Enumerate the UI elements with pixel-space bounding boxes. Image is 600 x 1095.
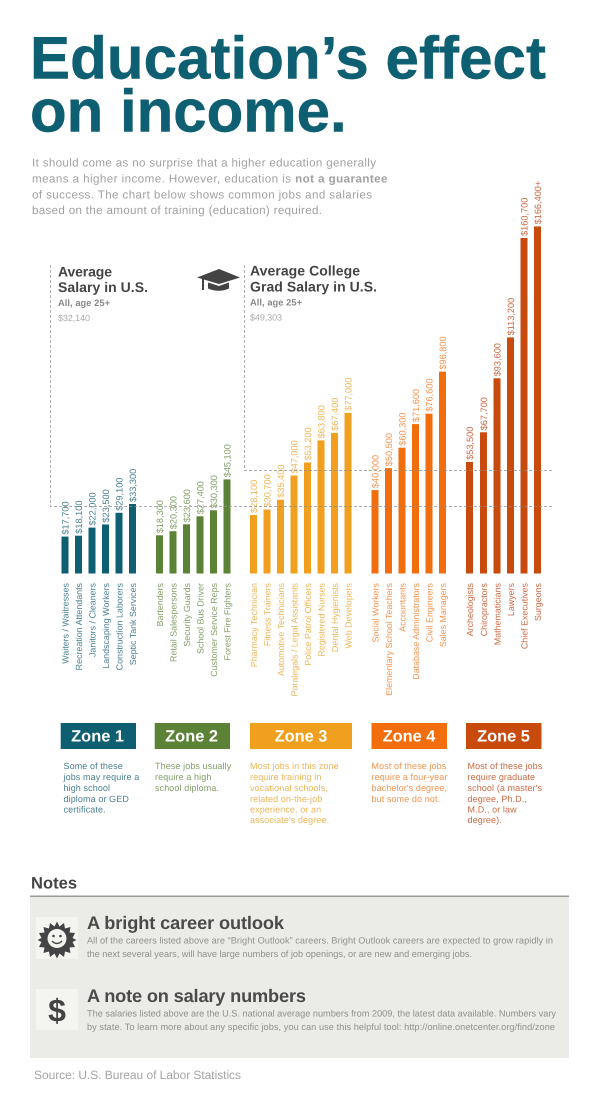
zone 4 bars: Elementary School Teachers (384, 582, 394, 696)
heading: average college grad salary: All, age 25+ (250, 298, 303, 308)
zone 3 bars (249, 378, 354, 696)
zone 4 legend: Zone 4 (383, 728, 436, 746)
intro paragraph: It should come as no surprise that a higher education generally (32, 157, 376, 170)
zone 5 bars: Archeologists (465, 582, 475, 636)
zone 4 bars: Sales Managers (438, 582, 448, 647)
zone 5 bars: Mathematicians (492, 582, 502, 645)
source: Source: U.S. Bureau of Labor Statistics (34, 1068, 241, 1082)
zone 3 legend (250, 723, 352, 825)
zone 1 bars: $33,300 (128, 469, 138, 502)
zone 5 bars: Chiropractors (479, 582, 489, 636)
zone 5 bars: Chief Executives (520, 582, 530, 649)
notes heading: Notes (31, 874, 77, 892)
zone 2 legend (155, 723, 232, 793)
zone 3 bars: $67,400 (330, 398, 340, 431)
zone 2 bars: Security Guards (182, 582, 192, 647)
zone 3 bars: $63,800 (316, 405, 326, 438)
zone 3 bars: $30,700 (262, 474, 272, 508)
title (30, 24, 546, 145)
zone 2 legend: These jobs usually (155, 761, 232, 771)
zone 5 legend (466, 723, 543, 825)
zone 4 bars: $76,600 (424, 378, 434, 412)
zone 3 bars: Registered Nurses (316, 582, 326, 656)
zone 5 legend: Most of these jobs (468, 761, 543, 771)
zone 5 bars (465, 181, 543, 649)
heading: average salary in U.S.: Average (58, 264, 112, 280)
heading: average college grad salary: $49,303 (250, 313, 282, 323)
zone 3 bars: Police Patrol Officers (303, 582, 313, 666)
zone 4 legend: Most of these jobs (372, 761, 447, 771)
zone 2 bars: Forest Fire Fighters (222, 582, 232, 660)
zone 5 legend: degree). (468, 815, 502, 825)
zone 2 bars: $20,300 (168, 496, 178, 529)
title: on income. (30, 78, 347, 145)
note: salary numbers: The salaries listed above are the U.S. national average numbers from 2009, the latest data available. Numbers vary (87, 1009, 556, 1019)
note: salary numbers: by state. To learn more about any specific jobs, you can use this helpful tool: http://online.onetcenter.org/find/zone (87, 1022, 555, 1032)
heading: average salary in U.S.: All, age 25+ (58, 298, 111, 308)
zone 2 bars: $27,400 (196, 481, 206, 514)
zone 3 bars: Web Developers (344, 582, 354, 648)
zone 4 bars: Civil Engineers (424, 582, 434, 642)
zone 3 bars: $28,100 (249, 480, 259, 513)
zone 5 bars: $53,500 (465, 427, 475, 460)
panel: notes (30, 897, 569, 1058)
zone 5 bars: Surgeons (533, 582, 543, 621)
zone 5 bars: $93,600 (492, 343, 502, 376)
zone 1 legend (61, 723, 139, 814)
zone 3 bars: $47,000 (290, 440, 300, 474)
note: salary numbers (87, 986, 556, 1032)
zone 1 bars: $23,500 (101, 489, 111, 522)
zone 1 legend: high school (64, 783, 110, 793)
zone 1 bars: $17,700 (60, 501, 70, 535)
zone 3 legend: vocational schools, (250, 783, 328, 793)
zone 4 bars: $96,800 (438, 336, 448, 370)
zone 2 bars: Retail Salespersons (168, 582, 178, 662)
note: bright career outlook (87, 913, 553, 959)
zone 1 legend: Zone 1 (71, 728, 124, 746)
zone 3 legend: require training in (250, 772, 321, 782)
note: bright career outlook: All of the careers listed above are “Bright Outlook” careers. Bright Outlook careers are expected to grow rapidly in (87, 935, 553, 945)
zone 5 bars: $67,700 (479, 397, 489, 430)
zone 3 bars: Pharmacy Technician (249, 583, 259, 667)
zone 3 legend: associate's degree. (250, 815, 329, 825)
average salary reference lines (50, 265, 552, 506)
heading: average salary in U.S.: Salary in U.S. (58, 279, 148, 295)
zone 3 bars: Dental Hygienists (330, 582, 340, 652)
zone 5 legend: Zone 5 (477, 728, 530, 746)
zone 3 legend: related on-the-job (250, 794, 322, 804)
title: Education’s effect (30, 24, 546, 91)
zone 2 bars: Bartenders (155, 582, 165, 626)
zone 1 bars: $29,100 (114, 478, 124, 511)
zone 4 legend: bachelor's degree, (372, 783, 447, 793)
note: bright career outlook: A bright career outlook (87, 913, 285, 933)
zone 5 legend: require graduate (468, 772, 535, 782)
zone 1 bars: Waiters / Waitresses (60, 582, 70, 664)
zone 3 legend: experience, or an (250, 804, 321, 814)
icon: dollar sign (36, 989, 78, 1030)
zone 3 legend: Zone 3 (275, 728, 327, 746)
zone 5 legend: school (a master's (468, 783, 542, 793)
zone 5 bars: $113,200 (506, 298, 516, 335)
zone 3 bars: $35,400 (276, 464, 286, 498)
zone 3 legend: Most jobs in this zone (250, 761, 339, 771)
zone 3 bars: $53,200 (303, 427, 313, 460)
heading: average college grad salary (250, 263, 377, 323)
zone 4 bars: $40,000 (370, 455, 380, 488)
intro paragraph: based on the amount of training (education) required. (32, 204, 322, 217)
zone 1 legend: certificate. (64, 804, 106, 814)
note: salary numbers: A note on salary numbers (87, 986, 306, 1006)
zone 4 legend (372, 723, 447, 804)
zone 1 bars: Landscaping Workers (101, 582, 111, 669)
intro paragraph: means a higher income. However, education is not a guarantee (32, 172, 388, 185)
zone 1 bars (60, 469, 138, 670)
zone 2 bars: $45,100 (222, 444, 232, 477)
zone 2 bars: Customer Service Reps (209, 582, 219, 677)
zone 2 bars: $18,300 (155, 500, 165, 533)
zone 4 bars: Database Administrators (411, 582, 421, 680)
icon: graduation cap (197, 269, 240, 291)
zone 4 bars: Social Workers (370, 582, 380, 643)
zone 2 bars: School Bus Driver (196, 583, 206, 654)
zone 2 bars: $30,300 (209, 475, 219, 508)
zone 1 bars: Construction Laborers (114, 582, 124, 670)
zone 1 bars: $18,100 (74, 500, 84, 534)
intro paragraph: of success. The chart below shows common jobs and salaries (32, 188, 372, 201)
zone 5 bars: $160,700 (520, 198, 530, 236)
zone 1 bars: Recreation Attendants (74, 582, 84, 670)
heading: average salary in U.S. (58, 264, 148, 323)
intro paragraph (32, 157, 388, 217)
zone 1 bars: $22,000 (88, 492, 98, 526)
zone 3 bars: $77,000 (344, 378, 354, 411)
zone 3 bars: Automotive Technicians (276, 582, 286, 676)
zone 5 legend: degree, Ph.D., (468, 794, 527, 804)
zone 1 bars: Septic Tank Services (128, 582, 138, 665)
zone 1 legend: jobs may require a (62, 772, 139, 782)
heading: average college grad salary: Average College (250, 263, 360, 279)
zone 1 legend: Some of these (64, 761, 123, 771)
zone 5 bars: Lawyers (506, 582, 516, 616)
note: bright career outlook: the next several years, will have large numbers of job openings, or are new and emerging jobs. (87, 949, 472, 959)
icon: dollar sign: $ (48, 992, 66, 1028)
zone 4 bars: $50,500 (384, 433, 394, 466)
icon: smiling sun (36, 917, 78, 959)
zone 3 bars: Paralegals / Legal Assistants (290, 582, 300, 696)
zone 2 legend: require a high (155, 772, 211, 782)
zone 4 bars: Accountants (398, 582, 408, 632)
zone 4 legend: require a four-year (372, 772, 447, 782)
zone 2 legend: school diploma. (155, 783, 219, 793)
zone 5 legend: M.D., or law (468, 804, 517, 814)
zone 2 legend: Zone 2 (165, 728, 218, 746)
zone 2 bars (155, 444, 232, 677)
zone 2 bars: $23,600 (182, 489, 192, 522)
zone 5 bars: $166,400+ (533, 181, 543, 224)
zone 4 bars: $60,300 (398, 412, 408, 446)
zone 1 legend: diploma or GED (64, 794, 129, 804)
zone 3 bars: Fitness Trainers (262, 582, 272, 646)
zone 4 legend: but some do not. (372, 794, 440, 804)
zone 1 bars: Janitors / Cleaners (88, 582, 98, 657)
heading: average salary in U.S.: $32,140 (58, 313, 90, 323)
zone 4 bars: $71,600 (411, 389, 421, 422)
heading: average college grad salary: Grad Salary in U.S. (250, 279, 377, 295)
zone 4 bars (370, 336, 448, 696)
